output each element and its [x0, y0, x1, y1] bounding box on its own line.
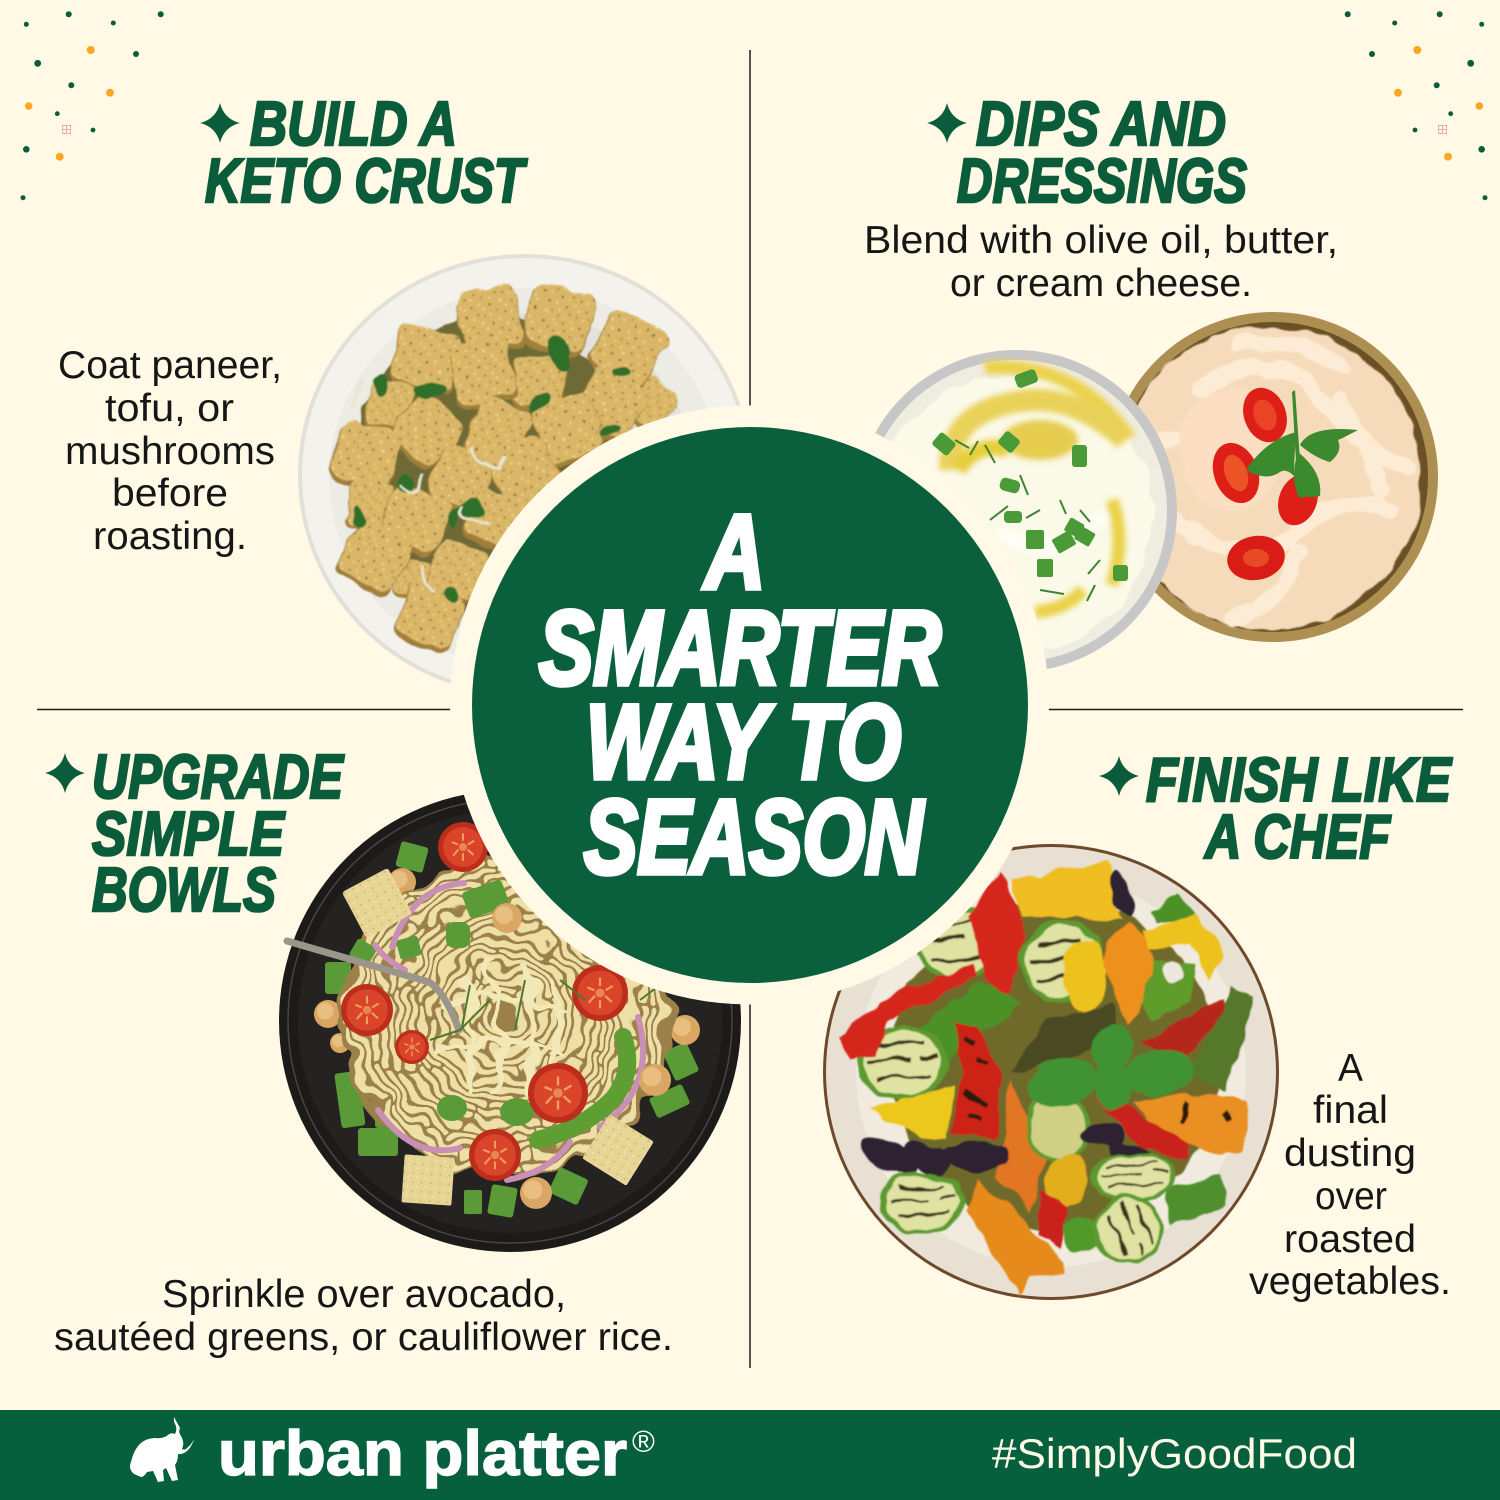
heading: upgrade simple bowls: SIMPLE	[92, 800, 285, 869]
image: bowl of crusted paneer cubes	[298, 254, 752, 696]
heading: upgrade simple bowls: UPGRADE	[92, 743, 344, 812]
title: a smarter way to season: SEASON	[584, 779, 925, 896]
confetti dots: top left	[20, 11, 164, 200]
text: blend with olive oil: or cream cheese.	[950, 262, 1252, 305]
text: coat paneer: before	[112, 472, 228, 515]
logo: elephant	[130, 1417, 194, 1482]
confetti dots: top right	[1345, 11, 1488, 200]
text: a final dusting	[1249, 1047, 1451, 1303]
text: a final dusting: dusting	[1284, 1132, 1416, 1175]
text: coat paneer: Coat paneer,	[58, 344, 282, 387]
heading: finish like a chef: A CHEF	[1203, 803, 1392, 872]
text: coat paneer: mushrooms	[65, 430, 275, 473]
heading: dips and dressings	[927, 90, 1247, 216]
title: a smarter way to season: A	[703, 494, 765, 611]
text: a final dusting: over	[1315, 1175, 1387, 1218]
text: sprinkle over avocado: Sprinkle over avocado,	[162, 1273, 566, 1316]
text: a final dusting: roasted	[1284, 1218, 1416, 1261]
text: coat paneer	[58, 344, 282, 558]
panel: finish like a chef	[823, 746, 1452, 1303]
panel: dips and dressings	[855, 90, 1438, 672]
hashtag: #SimplyGoodFood	[992, 1430, 1357, 1477]
image: noodle salad in black bowl	[279, 790, 741, 1252]
footer band	[0, 1410, 1500, 1500]
heading: dips and dressings: DRESSINGS	[957, 147, 1247, 216]
panel: upgrade simple bowls	[45, 743, 741, 1359]
heading: finish like a chef: FINISH LIKE	[1146, 746, 1452, 815]
center badge	[450, 406, 1049, 1004]
title: a smarter way to season: SMARTER	[539, 590, 941, 707]
text: sprinkle over avocado	[54, 1273, 673, 1359]
heading: upgrade simple bowls	[45, 743, 344, 925]
heading: finish like a chef	[1099, 746, 1452, 872]
title: a smarter way to season: WAY TO	[586, 684, 901, 801]
text: sprinkle over avocado: sautéed greens, or cauliflower rice.	[54, 1316, 673, 1359]
text: a final dusting: vegetables.	[1249, 1260, 1451, 1303]
text: a final dusting: final	[1313, 1089, 1388, 1132]
text: blend with olive oil: Blend with olive oil, butter,	[864, 219, 1338, 262]
title: a smarter way to season	[539, 494, 941, 896]
heading: upgrade simple bowls: BOWLS	[92, 856, 276, 925]
text: blend with olive oil	[864, 219, 1338, 305]
heading: build a keto crust	[200, 90, 528, 216]
heading: build a keto crust: BUILD A	[250, 90, 457, 159]
text: a final dusting: A	[1338, 1047, 1363, 1090]
text: coat paneer: tofu, or	[105, 387, 234, 430]
image: herb cream dip in white bowl	[855, 350, 1177, 672]
image: spicy whipped dip in brown bowl	[1108, 312, 1438, 642]
image: grilled vegetables on speckled plate	[823, 844, 1279, 1300]
text: coat paneer: roasting.	[93, 515, 247, 558]
heading: build a keto crust: KETO CRUST	[205, 147, 528, 216]
logo: urban platter wordmark: urban platter	[218, 1419, 627, 1489]
panel: build a keto crust	[58, 90, 752, 696]
logo: registered mark: ®	[632, 1424, 655, 1459]
heading: dips and dressings: DIPS AND	[976, 90, 1226, 159]
